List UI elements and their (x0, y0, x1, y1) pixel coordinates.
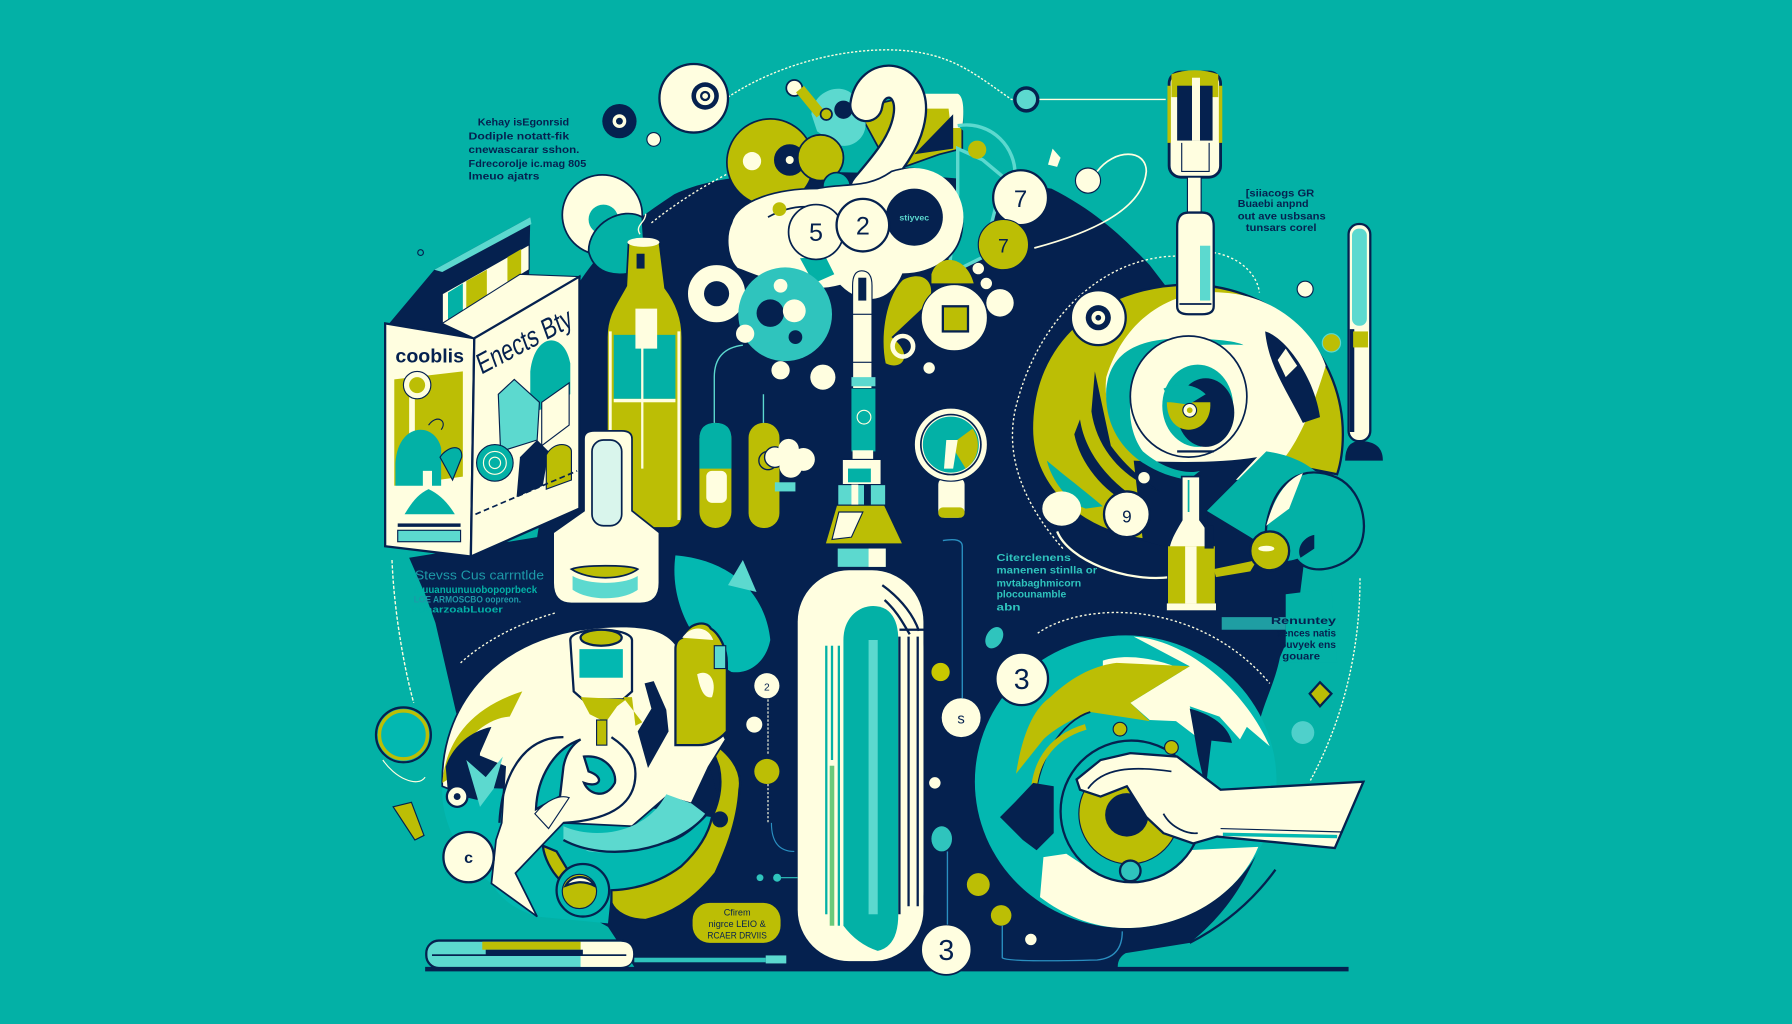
flask (553, 431, 659, 603)
cluster: bubbles and numerals (687, 80, 1048, 390)
olive pill label: Cfirem (724, 907, 751, 917)
pills (699, 345, 815, 528)
number 3 bubble lower: 3 (938, 935, 954, 967)
text block: center teal note: Citerclenens (997, 552, 1071, 564)
number 5 bubble: 5 (809, 219, 823, 247)
center tool (825, 271, 903, 567)
dashed connector arcs (392, 50, 1360, 943)
side vial top right (1169, 70, 1221, 314)
c bubble: c (464, 850, 473, 867)
number 3 bubble (995, 653, 1048, 705)
text block: top left note: cnewascarar sshon. (469, 145, 580, 156)
dropper vial (570, 630, 642, 745)
icon: target disc navy (602, 104, 661, 146)
olive 7 bubble (978, 219, 1029, 270)
lens icon (376, 707, 431, 782)
s bubble: s (957, 711, 965, 727)
text block: top left note: lmeuo ajatrs (469, 171, 540, 182)
olive bottle (675, 624, 727, 745)
text block: center teal note: manenen stinlla or (997, 565, 1097, 577)
olive bubble group (727, 80, 963, 206)
lower lens (557, 864, 609, 917)
box label: effects: Enects Bty (473, 302, 577, 381)
text block: lower left note: muuanuunuuobopoprbeck (414, 585, 538, 596)
text block: center teal note: abn (997, 601, 1021, 613)
text block: right lower note: Renuntey (1271, 616, 1336, 627)
number 9 bubble: 9 (1122, 506, 1132, 526)
text block: lower left note: Stevss Cus carrntlde (415, 568, 544, 582)
teal sphere (736, 267, 835, 390)
text block: center teal note: plocounamble (997, 589, 1066, 601)
numeral swirl 2 (866, 82, 910, 189)
number 2 bubble: 2 (856, 212, 870, 240)
number 9 bubble (1042, 472, 1170, 578)
teal leaf (674, 555, 770, 672)
text block: top right note: tunsars corel (1246, 223, 1317, 234)
text block: lower left note: LOE ARMOSCBO oopreon. (414, 594, 521, 604)
text block: right lower note: sences natis (1277, 629, 1336, 640)
bottom tube (426, 941, 786, 968)
numbered markers lower right (921, 540, 1331, 975)
text block: top right note: [siiacogs GR (1246, 189, 1314, 200)
text block: top left note: Kehay isEgonrsid (478, 118, 569, 129)
box left panel art (394, 371, 463, 542)
text block: center teal note (997, 552, 1097, 613)
bottle lower right (1167, 477, 1216, 610)
ring labelled: stiyvec (899, 214, 930, 223)
teal arch behind numerals (949, 125, 1015, 274)
spray bottle (607, 214, 682, 528)
marker chain: 2 (764, 682, 770, 693)
hand and arm (1077, 753, 1363, 848)
ring labelled (865, 168, 963, 266)
number 5 bubble (789, 205, 843, 259)
olive pill label (693, 903, 781, 943)
right lower sphere with hand (975, 635, 1363, 928)
left swirl sphere (442, 624, 740, 923)
text block: top left note (469, 118, 587, 182)
cloud (728, 168, 963, 300)
olive shard (393, 802, 424, 840)
number 3 bubble: 3 (1014, 664, 1030, 696)
text block: right lower note: ouvyek ens (1280, 640, 1336, 651)
donut (687, 264, 746, 323)
box label: cookies: cooblis (395, 345, 464, 367)
small scatter marks (418, 88, 1341, 352)
olive pill label: RCAER DRVIIS (707, 930, 767, 940)
right swirl sphere (1032, 285, 1343, 578)
text block: right lower note: gouare (1282, 651, 1320, 662)
marker chain (746, 673, 798, 882)
number 3 bubble lower (921, 851, 971, 975)
text block: right lower note (1222, 589, 1337, 663)
number 7 bubble: 7 (1014, 186, 1027, 213)
capsule tank (798, 570, 925, 961)
square bubble (884, 260, 1014, 374)
navy backdrop shape (409, 172, 1349, 971)
product box (385, 217, 579, 557)
text block: top right note (1238, 189, 1326, 234)
number 2 bubble (837, 199, 889, 251)
gauge (914, 408, 987, 518)
icon: teal swirl disc (562, 175, 646, 274)
icon: target disc large (659, 64, 728, 133)
text block: top right note: out ave usbsans (1238, 211, 1326, 222)
text block: lower left note: huaarzoabLuoer (411, 605, 503, 615)
text block: lower left note (411, 568, 544, 615)
box right panel art (475, 340, 577, 514)
text block: top right note: Buaebi anpnd (1238, 199, 1309, 210)
text block: top left note: Dodiple notatt-fik (469, 131, 570, 142)
text block: center teal note: mvtabaghmicorn (997, 577, 1081, 589)
s bubble (942, 540, 981, 737)
thermometer (1345, 224, 1383, 461)
target bubble (1071, 290, 1126, 345)
cloud glove (1214, 472, 1364, 577)
olive 7 bubble: 7 (998, 236, 1009, 258)
olive pill label: nigrce LEIO & (709, 919, 766, 929)
number 7 bubble (993, 170, 1048, 225)
text block: top left note: Fdrecorolje ic.mag 805 (469, 159, 587, 170)
c bubble (443, 832, 494, 882)
